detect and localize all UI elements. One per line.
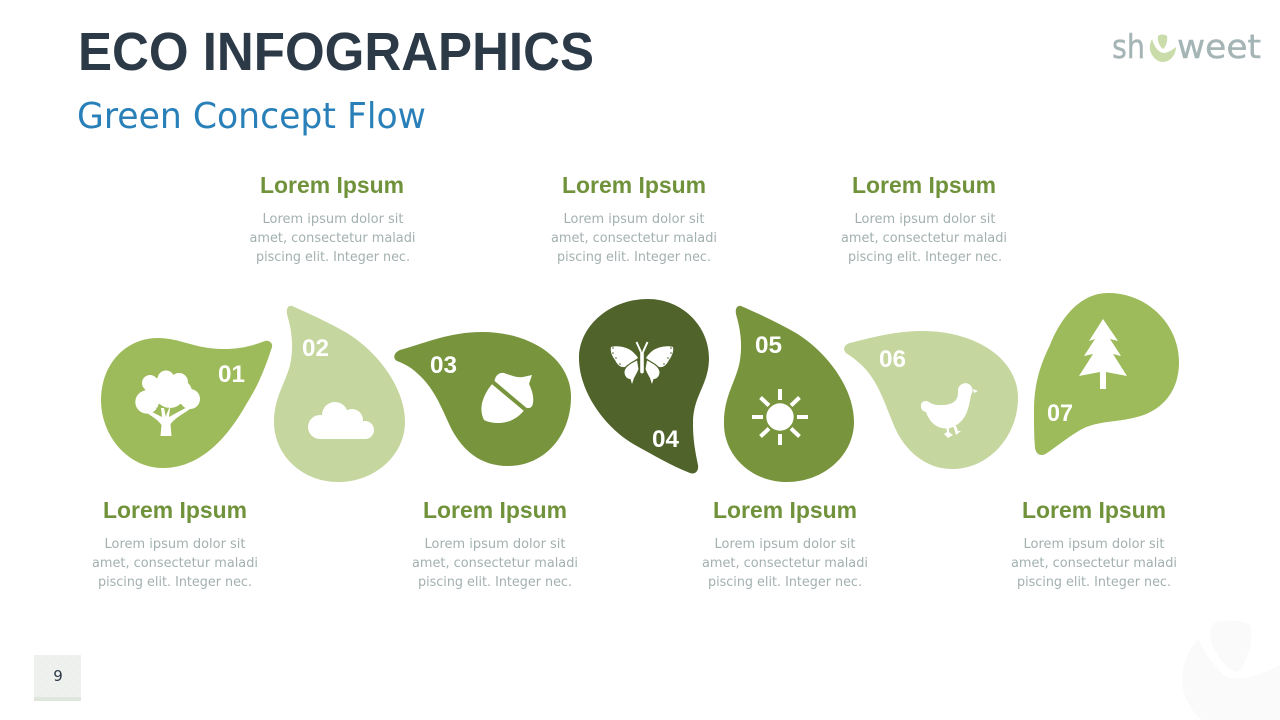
text block: top 3: Lorem ipsum dolor sit <box>854 212 996 227</box>
text block: bottom 4: Lorem ipsum dolor sit <box>1024 537 1164 552</box>
text block: top 1: Lorem ipsum dolor sit <box>262 212 404 227</box>
text block: bottom 3 <box>702 497 868 590</box>
icon: butterfly <box>611 342 673 384</box>
number 01: 01 <box>218 361 245 388</box>
drop 03 with acorn <box>394 332 571 466</box>
text block: bottom 3: Lorem ipsum dolor sit <box>714 537 856 552</box>
text block: bottom 2: amet, consectetur maladi <box>412 556 578 571</box>
text block: top 1 <box>250 172 416 265</box>
drop 04 with butterfly <box>579 299 709 474</box>
number 07: 07 <box>1047 400 1073 427</box>
drop 07 with pine tree <box>1034 293 1179 455</box>
text block: bottom 1: amet, consectetur maladi <box>92 556 258 571</box>
icon: cloud <box>308 402 374 439</box>
drop 02 with cloud <box>274 306 405 482</box>
title: ECO INFOGRAPHICS <box>78 22 594 82</box>
text block: bottom 3: Lorem Ipsum <box>713 497 857 523</box>
icon: sun <box>752 389 808 445</box>
icon: tree <box>135 370 200 436</box>
showeet logo: weet <box>1177 27 1261 66</box>
number 05: 05 <box>755 332 782 359</box>
text block: bottom 3: piscing elit. Integer nec. <box>708 575 862 590</box>
text block: bottom 4 <box>1011 497 1177 590</box>
text block: top 2: Lorem ipsum dolor sit <box>564 212 704 227</box>
text block: bottom 2: Lorem Ipsum <box>423 497 567 523</box>
subtitle: Green Concept Flow <box>77 96 426 137</box>
text block: bottom 2: Lorem ipsum dolor sit <box>424 537 566 552</box>
icon: duck <box>921 383 978 438</box>
showeet logo <box>1112 27 1261 66</box>
text block: bottom 1: Lorem Ipsum <box>103 497 247 523</box>
text block: bottom 1: piscing elit. Integer nec. <box>98 575 252 590</box>
text block: top 3: piscing elit. Integer nec. <box>848 250 1002 265</box>
watermark logo <box>1182 621 1280 720</box>
text block: top 1: Lorem Ipsum <box>260 172 404 198</box>
number 04: 04 <box>652 426 680 453</box>
drop 06 with duck <box>844 331 1018 469</box>
text block: bottom 4: piscing elit. Integer nec. <box>1017 575 1171 590</box>
number 03: 03 <box>430 352 457 379</box>
text block: bottom 1 <box>92 497 258 590</box>
text block: bottom 4: Lorem Ipsum <box>1022 497 1166 523</box>
number 06: 06 <box>879 346 906 373</box>
text block: top 3: Lorem Ipsum <box>852 172 996 198</box>
text block: top 2: piscing elit. Integer nec. <box>557 250 711 265</box>
text block: bottom 3: amet, consectetur maladi <box>702 556 868 571</box>
drop 05 with sun <box>724 306 854 482</box>
page number box: 9 <box>53 667 63 685</box>
text block: top 3 <box>841 172 1007 265</box>
text block: top 1: piscing elit. Integer nec. <box>256 250 410 265</box>
text block: top 3: amet, consectetur maladi <box>841 231 1007 246</box>
drop 01 with tree <box>101 338 272 468</box>
text block: bottom 1: Lorem ipsum dolor sit <box>104 537 246 552</box>
showeet logo: sh <box>1112 27 1145 66</box>
icon: pine tree <box>1079 319 1127 389</box>
text block: top 2 <box>551 172 717 265</box>
text block: bottom 4: amet, consectetur maladi <box>1011 556 1177 571</box>
icon: acorn <box>481 373 533 423</box>
text block: bottom 2 <box>412 497 578 590</box>
page number box <box>34 655 81 701</box>
text block: bottom 2: piscing elit. Integer nec. <box>418 575 572 590</box>
text block: top 2: amet, consectetur maladi <box>551 231 717 246</box>
text block: top 2: Lorem Ipsum <box>562 172 706 198</box>
number 02: 02 <box>302 335 329 362</box>
text block: top 1: amet, consectetur maladi <box>250 231 416 246</box>
